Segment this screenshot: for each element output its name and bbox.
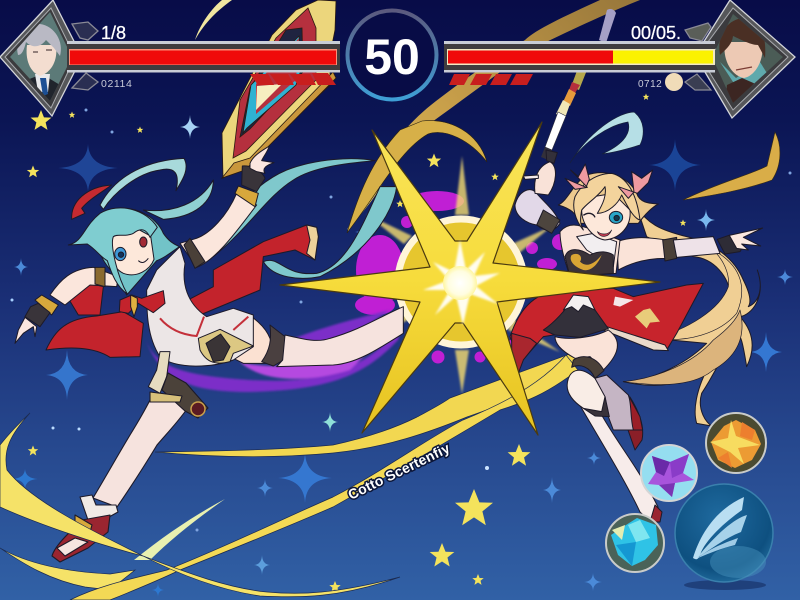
coin icon [665, 73, 683, 91]
round timer: 50 [364, 29, 420, 85]
rank text right: 00/05. [631, 23, 681, 43]
portrait right [700, 0, 800, 118]
red boot behind [512, 333, 537, 373]
background sparkles [10, 108, 793, 597]
score text right: 0712 [638, 79, 662, 90]
waist and torso [230, 313, 273, 363]
score icon right [685, 74, 711, 90]
rank icon right [685, 23, 711, 41]
back cape [182, 225, 318, 315]
tilted caption: Cotto Scertenfiy [345, 440, 452, 503]
left arm [50, 267, 118, 305]
raised arm [515, 190, 560, 230]
hair behind head [100, 208, 179, 295]
light rays [358, 156, 560, 394]
combo chevrons right [449, 74, 533, 85]
outstretched arm [617, 238, 667, 270]
player two HUD [444, 0, 800, 118]
head [558, 173, 658, 223]
red hair tie [72, 185, 112, 219]
white core [423, 240, 500, 325]
skill cyan gem [606, 514, 664, 572]
white ring [398, 219, 524, 345]
raised arm [180, 193, 257, 267]
left crescent swoosh [0, 413, 400, 597]
hair ribbons [197, 159, 375, 257]
front leg [277, 307, 403, 367]
left fighter shield [222, 0, 336, 178]
left fighter rear leg [52, 373, 208, 562]
right fighter [510, 150, 763, 430]
magenta energy blobs [355, 191, 568, 364]
rank icon [72, 22, 98, 40]
skill purple gem [641, 445, 697, 501]
bow [119, 291, 165, 313]
health bar left [67, 41, 340, 72]
dash button [675, 484, 773, 590]
right fighter lower legs [578, 397, 662, 522]
red skirt [510, 283, 703, 363]
left fighter [15, 146, 403, 393]
score icon [72, 73, 98, 90]
left cape [68, 283, 103, 315]
health bar right [444, 41, 715, 72]
purple aura of left fighter [145, 310, 400, 392]
player one HUD [0, 0, 340, 116]
rank text: 1/8 [101, 23, 126, 43]
central star burst [280, 122, 660, 435]
portrait left [0, 0, 75, 118]
skill orange gem [706, 413, 766, 473]
right fighter staff [541, 9, 616, 160]
legs [555, 330, 617, 370]
black skirt [543, 297, 608, 337]
top gold swooshes [195, 0, 780, 233]
score text: 02114 [101, 78, 132, 90]
yellow stars [27, 94, 686, 592]
thigh strap [262, 325, 285, 366]
combo chevrons left [250, 73, 336, 85]
bottom swooshes [0, 352, 578, 600]
head [110, 227, 154, 275]
long hair [623, 207, 760, 426]
torso [560, 225, 620, 277]
hair ribbons behind right fighter [570, 112, 643, 163]
round timer [348, 10, 436, 100]
pink bows [565, 164, 589, 189]
